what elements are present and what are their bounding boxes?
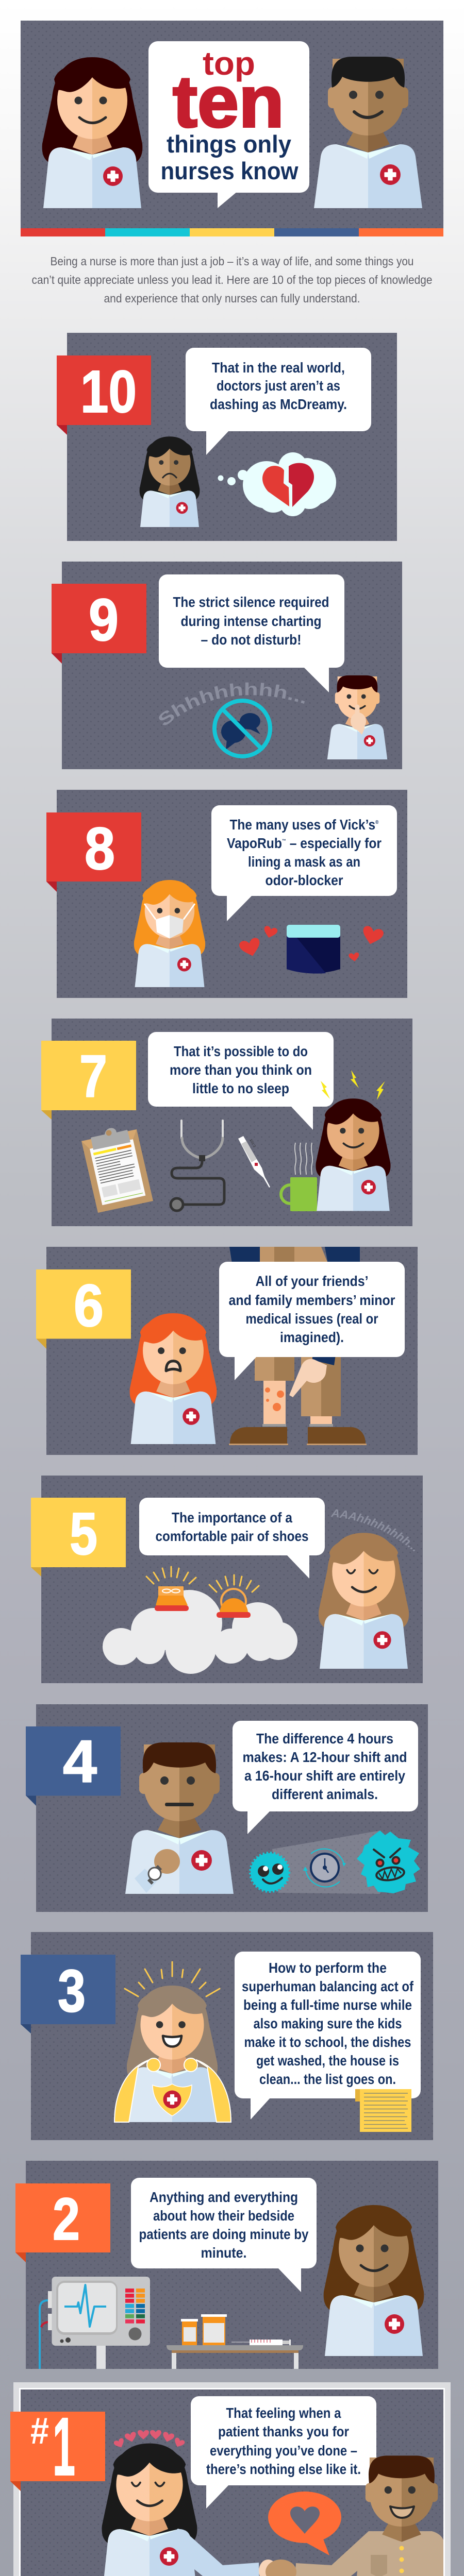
number tag 10: 10 — [80, 358, 137, 425]
speech bubble 3: get washed, the house is — [256, 2053, 399, 2069]
jar of vapor rub — [287, 925, 340, 974]
hearts arc — [113, 2430, 186, 2449]
title — [161, 45, 299, 184]
heart monitor — [40, 2277, 150, 2369]
speech bubble 1 — [191, 2396, 376, 2509]
speech bubble 2: about how their bedside — [153, 2208, 294, 2224]
friendly germ — [251, 1853, 289, 1891]
speech bubble 2 — [131, 2178, 317, 2292]
to-do list note — [355, 2089, 411, 2132]
mug with steam — [281, 1143, 317, 1211]
speech bubble 9: – do not disturb! — [201, 632, 301, 648]
tired nurse — [316, 1098, 391, 1211]
speech bubble 2: minute. — [201, 2245, 246, 2261]
angry germ — [357, 1831, 420, 1893]
heart speech bubble — [268, 2492, 341, 2555]
intro text — [32, 255, 432, 305]
stethoscope — [171, 1121, 224, 1211]
no talking icon — [214, 701, 270, 756]
number tag 7 — [41, 1041, 136, 1120]
speech bubble 5 — [139, 1498, 325, 1579]
intro text: Being a nurse is more than just a job – it’s a way of life, and some things you — [51, 255, 413, 268]
number tag 3: 3 — [58, 1957, 86, 2024]
number tag 9 — [52, 584, 146, 664]
clipboard — [81, 1128, 153, 1213]
smiling nurse — [324, 2205, 424, 2356]
speech bubble 3: clean... the list goes on. — [259, 2071, 396, 2087]
panel: number 9 — [52, 562, 402, 769]
shhh text: Shhhhhhhh... — [159, 682, 305, 725]
speech bubble 1: everything you’ve done – — [210, 2443, 357, 2459]
speech bubble 3: How to perform the — [269, 1960, 387, 1976]
super nurse — [114, 1986, 231, 2122]
lightning bolts — [321, 1070, 385, 1100]
number tag 2 — [15, 2183, 110, 2262]
speech bubble 7: more than you think on — [170, 1062, 312, 1078]
panel: number 8 — [46, 790, 407, 998]
nurse: man right — [314, 57, 422, 208]
speech bubble 10: That in the real world, — [212, 360, 345, 376]
speech bubble 9: during intense charting — [180, 613, 322, 629]
title: nurses know — [161, 157, 299, 184]
speech bubble 4 — [233, 1721, 418, 1834]
speech bubble 1: there’s nothing else like it. — [206, 2461, 361, 2477]
watch-checking nurse — [125, 1742, 234, 1894]
panel: number 2 — [15, 2161, 438, 2369]
comfy shoes — [146, 1567, 259, 1618]
intro text: and experience that only nurses can fully understand. — [104, 292, 360, 305]
glow rays — [125, 1962, 220, 1996]
speech bubble 10: dashing as McDreamy. — [210, 396, 347, 412]
number tag 8: 8 — [85, 815, 115, 882]
table with bottles and syringe — [167, 2314, 303, 2369]
speech bubble 5: The importance of a — [172, 1510, 292, 1526]
masked nurse — [134, 880, 205, 987]
speech bubble 8: VapoRub — [227, 835, 289, 851]
number tag 1 — [10, 2400, 105, 2493]
relaxed nurse — [319, 1533, 409, 1669]
speech bubble 7 — [148, 1032, 334, 1130]
speech bubble 3: superhuman balancing act of — [242, 1978, 414, 1994]
speech bubble 9 — [159, 574, 344, 692]
number tag 9: 9 — [89, 586, 119, 653]
cloud — [103, 1590, 297, 1674]
title speech bubble — [148, 41, 309, 208]
speech bubble 8: lining a mask as an — [248, 854, 360, 870]
number tag 3 — [21, 1955, 115, 2033]
hearts — [238, 925, 385, 962]
worried nurse — [130, 1313, 217, 1444]
speech bubble 8: ™ — [282, 838, 286, 843]
number tag 2: 2 — [53, 2185, 80, 2252]
speech bubble 1: patient thanks you for — [218, 2424, 349, 2439]
speech bubble 7: That it’s possible to do — [174, 1043, 308, 1059]
speech bubble 3: being a full-time nurse while — [243, 1997, 412, 2013]
panel: number 7 — [41, 1019, 412, 1226]
speech bubble 7: little to no sleep — [192, 1080, 289, 1096]
number tag 6: 6 — [74, 1272, 104, 1339]
speech bubble 6 — [219, 1262, 405, 1380]
speech bubble 5: comfortable pair of shoes — [156, 1528, 308, 1544]
sad nurse — [140, 436, 200, 527]
nurse shaking hands — [102, 2444, 277, 2576]
speech bubble 3 — [235, 1952, 421, 2120]
panel: number 1 — [10, 2382, 451, 2576]
panel: number 5 — [31, 1476, 423, 1683]
speech bubble 6: and family members’ minor — [229, 1292, 395, 1308]
nurse: woman left — [42, 57, 142, 208]
speech bubble 8 — [211, 805, 397, 921]
speech bubble 10: doctors just aren’t as — [217, 378, 340, 394]
thermometer: 101.3 — [248, 1139, 256, 1148]
aaahhh text: AAAhhhhhhhh... — [331, 1510, 416, 1552]
number tag 4: 4 — [63, 1728, 97, 1795]
light beam — [272, 1831, 380, 1894]
speech bubble 4: makes: A 12-hour shift and — [242, 1749, 407, 1765]
speech bubble 3: make it to school, the dishes — [244, 2034, 411, 2050]
panel: number 6 — [36, 1247, 418, 1455]
speech bubble 6: imagined). — [280, 1329, 344, 1345]
speech bubble 1: That feeling when a — [226, 2405, 341, 2421]
header panel — [21, 21, 443, 236]
speech bubble 4: a 16-hour shift are entirely — [244, 1768, 405, 1784]
speech bubble 10 — [186, 348, 371, 455]
panel: number 10 — [57, 333, 397, 541]
thankful patient — [266, 2455, 443, 2576]
speech bubble 4: The difference 4 hours — [256, 1731, 393, 1747]
number tag 8 — [46, 812, 141, 892]
speech bubble 9: The strict silence required — [173, 594, 329, 610]
title: ten — [173, 61, 284, 143]
speech bubble 3: also making sure the kids — [254, 2015, 402, 2031]
speech bubble 2: Anything and everything — [150, 2189, 298, 2205]
number tag 1: 1 — [53, 2400, 75, 2493]
speech bubble 8: ® — [375, 820, 379, 825]
speech bubble 8: odor-blocker — [265, 872, 343, 888]
panel: number 3 — [21, 1932, 433, 2140]
speech bubble 8: The many uses of Vick’s — [230, 817, 396, 833]
number tag 7: 7 — [79, 1043, 107, 1110]
shushing nurse — [327, 675, 387, 759]
colour stripe — [21, 228, 443, 236]
panel: number 4 — [26, 1704, 428, 1912]
number tag 6 — [36, 1269, 131, 1349]
speech bubble 2: patients are doing minute by — [139, 2226, 309, 2242]
speech bubble 4: different animals. — [272, 1786, 378, 1802]
number tag 1: # — [30, 2411, 49, 2452]
number tag 10 — [57, 355, 151, 435]
intro text: can’t quite appreciate unless you lead it. Here are 10 of the top pieces of knowledge — [32, 273, 432, 286]
thought cloud with broken heart — [218, 452, 336, 516]
number tag 5 — [31, 1498, 126, 1577]
speech bubble 6: All of your friends’ — [256, 1273, 368, 1289]
patient with rash — [229, 1247, 367, 1445]
speech bubble 6: medical issues (real or — [245, 1311, 378, 1327]
speech bubble 8: – especially for — [286, 835, 382, 851]
title: things only — [167, 130, 291, 158]
clock — [303, 1849, 346, 1887]
title: top — [203, 45, 255, 82]
thermometer — [238, 1136, 270, 1188]
number tag 5: 5 — [70, 1500, 97, 1567]
number tag 4 — [26, 1726, 121, 1806]
